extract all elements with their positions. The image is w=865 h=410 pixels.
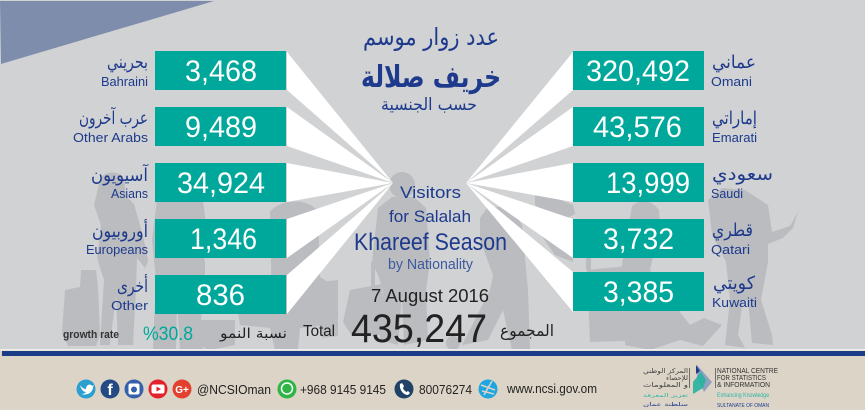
panel: Qatari: 3,732 [603,223,674,256]
panel: Bahraini: Bahraini [101,74,148,89]
logo: English organisation name: & INFORMATION [717,382,770,389]
panel: Bahraini: بحريني [107,52,148,73]
panel: Other Arabs: عرب آخرون [79,106,148,129]
panel: Europeans [86,219,286,258]
total: Total [303,323,335,340]
panel: Omani: عماني [712,52,756,73]
Arabic title [361,23,501,115]
English title [354,183,507,273]
panel: Kuwaiti: 3,385 [603,276,674,309]
growth rate [63,324,287,345]
panel: Other: Other [111,298,149,313]
Arabic title: عدد زوار موسم [363,23,499,51]
panel: Europeans: Europeans [86,242,148,257]
panel: Emarati [573,107,757,146]
panel: Qatari: قطري [712,220,753,241]
panel: Other Arabs: 9,489 [185,111,257,144]
panel: Asians [91,163,286,202]
icon: whatsapp [278,380,296,398]
logo: Arabic organisation name: للإحصاء [666,374,688,382]
icon: facebook [100,380,120,399]
icon: twitter [76,380,96,398]
logo: Arabic organisation name [643,367,690,408]
panel: Other: أخرى [117,274,148,297]
logo: English organisation name: SULTANATE OF OMAN [717,403,769,409]
corner triangle [0,1,214,64]
English title: Khareef Season [354,229,507,256]
panel: Asians: آسيويون [91,163,149,186]
panel: Other Arabs: Other Arabs [73,130,149,145]
panel: Emarati: إماراتي [712,108,757,129]
icon: facebook: f [107,382,113,399]
icon: google plus: G+ [175,385,189,396]
panel: Omani [573,51,756,90]
logo: English organisation name: NATIONAL CENTRE [717,368,778,375]
logo: Arabic organisation name: سلطنة عمان [643,402,688,408]
panel: Europeans: 1,346 [190,223,257,256]
logo: emblem [693,365,712,394]
logo: English organisation name: FOR STATISTICS [717,375,766,382]
date: 7 August 2016 [371,286,489,306]
English title: by Nationality [388,256,473,273]
total: المجموع [500,321,554,341]
panel: Bahraini [101,51,286,90]
panel: Saudi: Saudi [711,186,743,201]
rays: right [466,52,573,312]
panel: Kuwaiti [573,272,757,311]
logo: English organisation name: Enhancing Knowledge [717,393,770,399]
English title: Visitors [400,183,461,202]
growth rate: growth rate [63,329,119,341]
panel: Bahraini: 3,468 [185,55,257,88]
toll free number: 80076274 [419,382,472,397]
icon: google plus [172,380,192,398]
icon: youtube [148,380,168,398]
panel: Saudi: 13,999 [606,167,690,200]
icon: phone [394,380,414,398]
panel: Kuwaiti: Kuwaiti [712,295,757,310]
total [303,307,554,351]
panel: Asians: 34,924 [177,167,265,200]
social handle: @NCSIOman [197,382,271,397]
panel: Saudi [573,163,773,202]
Arabic title: خريف صلالة [361,60,501,95]
Arabic title: حسب الجنسية [381,95,477,115]
panel: Asians: Asians [111,186,148,201]
logo: Arabic organisation name: تعزيز المعرفة [643,393,689,399]
website: www.ncsi.gov.om [506,381,597,396]
footer [0,349,865,410]
panel: Qatari: Qatari [711,242,750,257]
panel: Europeans: أوروبيون [92,219,148,242]
traveller silhouettes [62,172,798,350]
logo: Arabic organisation name: المركز الوطني [643,367,688,375]
panel: Kuwaiti: كويتي [713,273,755,294]
panel: Other Arabs [73,106,286,146]
rays: left [287,52,393,314]
panel: Omani: 320,492 [586,55,690,88]
panel: Other [111,274,286,314]
panel: Qatari [573,219,753,258]
icon: instagram [124,380,144,398]
growth rate: %30.8 [143,324,193,345]
panel: Saudi: سعودي [712,164,773,185]
English title: for Salalah [389,207,471,226]
growth rate: نسبة النمو [219,326,287,342]
logo: Arabic organisation name: و المعلومات [643,381,688,389]
panel: Emarati: 43,576 [593,111,682,144]
phone number: +968 9145 9145 [300,382,386,397]
icon: globe [478,380,498,398]
total: 435,247 [351,307,487,351]
logo: English organisation name [715,368,778,409]
panel: Other: 836 [196,279,245,312]
panel: Emarati: Emarati [712,130,757,145]
panel: Omani: Omani [711,74,752,89]
